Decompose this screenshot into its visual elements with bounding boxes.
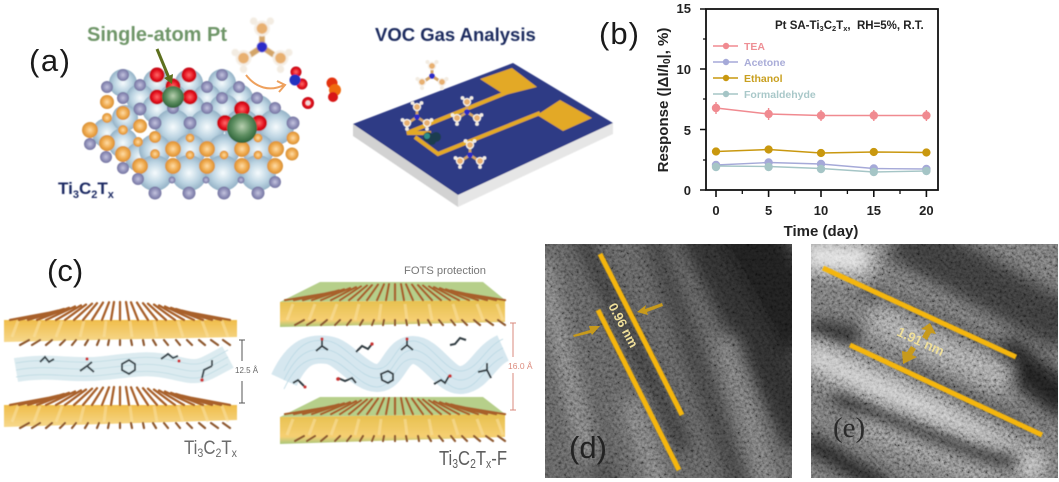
heading: VOC Gas Analysis: VOC Gas Analysis [375, 24, 536, 45]
icon: adsorbed molecules [400, 60, 486, 169]
series: Acetone [712, 159, 930, 172]
label Ti3C2Tx: 3 [73, 189, 79, 201]
series: Ethanol [713, 146, 930, 156]
measurement lines [823, 268, 1042, 435]
label Ti3C2Tx-F: 3 [452, 457, 458, 471]
y axis numbers: 0 [684, 183, 691, 198]
x axis numbers [712, 203, 934, 218]
label Ti3C2Tx: Ti [58, 179, 73, 198]
diagram: Ti3C2Tx-F layers [280, 282, 505, 444]
label Ti3C2Tx: x [108, 189, 115, 201]
water band [16, 350, 228, 378]
label Ti3C2Tx: C [79, 179, 91, 198]
y axis title: 0 [662, 58, 673, 64]
label Ti3C2Tx: C [203, 438, 215, 459]
x axis title: Time (day) [784, 223, 858, 240]
heading: single-atom Pt: Single-atom Pt [87, 24, 227, 46]
label (e): (e) [833, 412, 865, 444]
panel c: interlayer diagrams: 16.0 Å [508, 361, 533, 371]
arrows: spacing [573, 303, 663, 337]
x axis numbers: 5 [765, 203, 772, 218]
x axis numbers: 15 [867, 203, 881, 218]
dimension 12.5 A [239, 340, 245, 403]
legend: Formaldehyde [744, 89, 816, 101]
icon: reaction products [290, 66, 341, 109]
chart condition note: 3 [820, 24, 824, 33]
chart condition note: Pt SA-Ti [775, 20, 820, 32]
panel b: stability chart [599, 1, 938, 240]
chart condition note: x [843, 24, 848, 33]
legend [713, 41, 816, 101]
molecules [293, 338, 491, 386]
x axis numbers: 20 [919, 203, 934, 218]
y axis numbers: 15 [677, 1, 691, 16]
label Ti3C2Tx-F: 2 [470, 457, 476, 471]
panel c: interlayer diagrams [4, 253, 533, 471]
panel c: interlayer diagrams: 12.5 Å [235, 366, 259, 375]
legend: TEA [744, 41, 765, 53]
y axis title: |, %) [655, 28, 672, 58]
label Ti3C2Tx: 2 [91, 189, 97, 201]
panel d: TEM image [545, 244, 792, 478]
chart condition note: , RH=5%, R.T. [847, 20, 924, 32]
sensing material [423, 132, 441, 145]
label Ti3C2Tx: T [97, 179, 108, 198]
diagram: Ti3C2Tx layers [4, 302, 237, 428]
water band [284, 339, 503, 389]
label Ti3C2Tx: 3 [197, 446, 204, 460]
label Ti3C2Tx: T [221, 438, 232, 459]
device substrate [353, 63, 613, 207]
molecules [40, 354, 212, 378]
legend: Ethanol [744, 73, 783, 85]
label Ti3C2Tx-F: x [486, 457, 492, 471]
chart condition note: 2 [832, 24, 836, 33]
y axis numbers: 10 [677, 62, 691, 77]
atomic lattice illustration [82, 68, 300, 200]
dimension 16.0 A [510, 323, 516, 410]
series: TEA [712, 102, 930, 121]
series: Formaldehyde [712, 164, 930, 176]
label Ti3C2Tx-F: C [458, 448, 470, 470]
label Ti3C2Tx-F: T [476, 448, 486, 470]
measurement lines [598, 254, 682, 470]
label Ti3C2Tx: Ti [184, 438, 199, 459]
label (b): (b) [599, 16, 640, 51]
TEM background [545, 244, 792, 478]
label Ti3C2Tx-F: -F [491, 448, 507, 470]
x axis numbers: 10 [814, 203, 828, 218]
label Ti3C2Tx: x [232, 446, 237, 460]
gold electrodes [480, 68, 592, 131]
label Ti3C2Tx: 2 [215, 446, 222, 460]
chart condition note: T [836, 20, 843, 32]
label Ti3C2Tx-F: Ti [439, 448, 455, 470]
label (c): (c) [47, 253, 83, 288]
y axis numbers [677, 1, 691, 198]
measurement text 0.96 nm: 0.96 nm [605, 300, 641, 350]
label (a): (a) [29, 43, 71, 78]
arrow: curved desorption [246, 75, 285, 92]
TEM background [805, 235, 1059, 482]
panel a: single-atom Pt on Ti3C2Tx [29, 17, 341, 201]
y axis title: Response (|ΔI/I [655, 64, 672, 172]
arrow: points to Pt atom [157, 49, 173, 84]
panel e: TEM image [805, 235, 1059, 482]
legend: Acetone [744, 57, 786, 69]
measurement text 1.91 nm: 1.91 nm [895, 324, 947, 359]
chart frame and ticks [700, 9, 938, 197]
label (d): (d) [569, 430, 607, 465]
chart condition note: C [824, 20, 832, 32]
icon: TEA molecule [231, 17, 293, 73]
note: FOTS protection: FOTS protection [404, 265, 486, 277]
panel a right: VOC gas analysis device [353, 24, 613, 207]
double arrow: spacing [902, 323, 936, 364]
x axis numbers: 0 [712, 203, 720, 218]
y axis numbers: 5 [684, 123, 691, 138]
